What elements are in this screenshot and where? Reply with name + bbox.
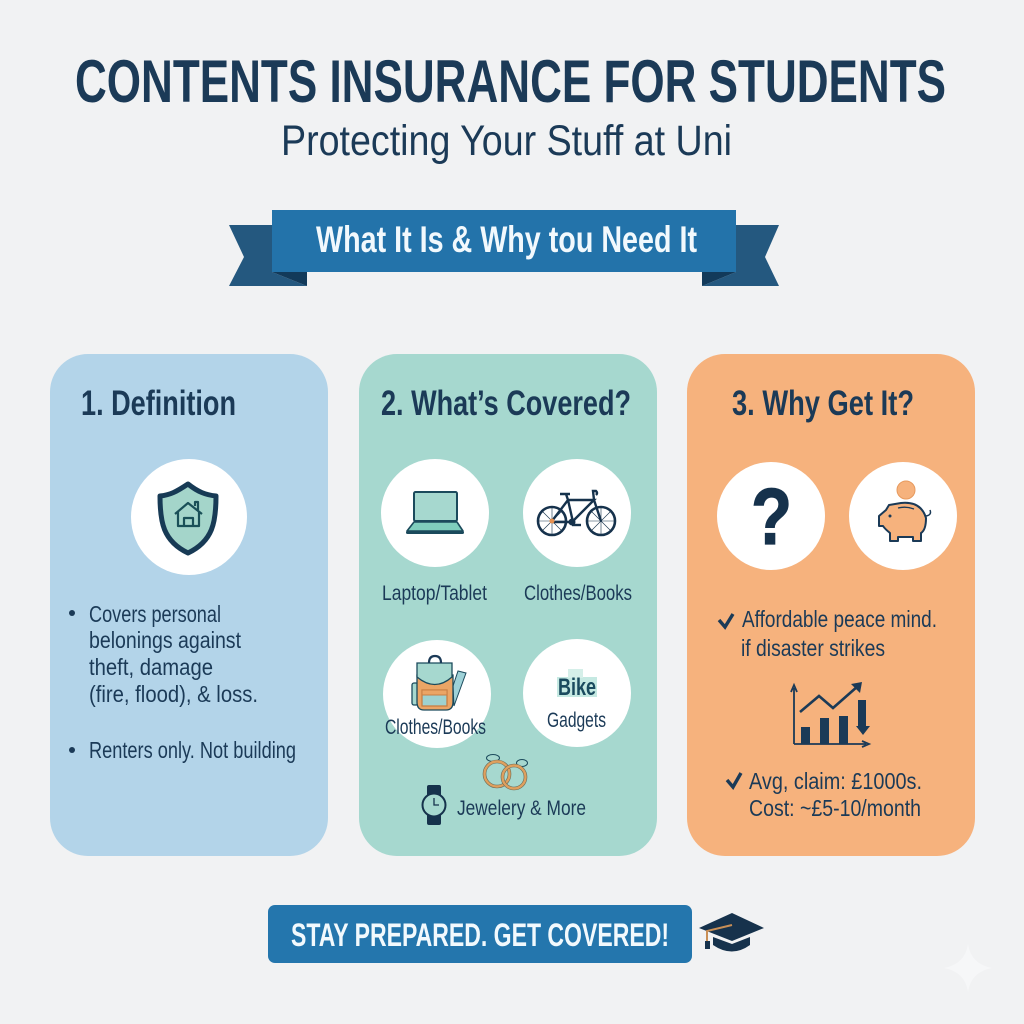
definition bullets: belonings against [89, 627, 242, 653]
icon: graduation cap [699, 913, 764, 952]
icon: shield with house [131, 459, 247, 575]
first benefit: if disaster strikes [741, 635, 885, 661]
circle: bike and gadgets: Gadgets [547, 709, 606, 732]
icon: question mark: ? [751, 472, 792, 561]
panel heading: covered: 2. What’s Covered? [381, 384, 631, 423]
label: laptop: Laptop/Tablet [382, 582, 487, 605]
decorative sparkle [944, 944, 992, 992]
label: jewelery and more: Jewelery & More [457, 797, 586, 820]
definition bullets [69, 601, 296, 763]
icon: bar and trend chart [791, 682, 870, 747]
banner text: What It Is & Why tou Need It [316, 219, 697, 260]
call to action button [268, 905, 692, 963]
icon: bicycle [523, 459, 631, 567]
label: clothes/books 1: Clothes/Books [524, 582, 632, 605]
call to action button: STAY PREPARED. GET COVERED! [291, 917, 669, 953]
definition bullets: Renters only. Not building [89, 737, 296, 763]
definition bullets: theft, damage [89, 654, 213, 680]
label: clothes/books 2: Clothes/Books [385, 716, 486, 739]
circle: bike and gadgets [523, 639, 631, 747]
panel: why get it [687, 354, 975, 856]
first benefit: Affordable peace mind. [742, 606, 937, 632]
icon: backpack [383, 640, 491, 748]
icon: laptop [381, 459, 489, 567]
icon: rings [484, 754, 528, 788]
panel heading: why: 3. Why Get It? [732, 384, 914, 423]
panel: what's covered [359, 354, 657, 856]
section banner [229, 210, 779, 286]
definition bullets: Covers personal [89, 601, 221, 627]
second benefit: Cost: ~£5-10/month [749, 795, 921, 821]
icon: watch [422, 785, 446, 825]
circle: bike and gadgets: Bike [558, 674, 596, 701]
icon: piggy bank [849, 462, 957, 570]
subtitle: Protecting Your Stuff at Uni [281, 117, 732, 165]
panel: definition [50, 354, 328, 856]
second benefit [727, 768, 922, 821]
icon: question mark [717, 462, 825, 570]
definition bullets: (fire, flood), & loss. [89, 681, 258, 707]
first benefit [719, 606, 937, 661]
second benefit: Avg, claim: £1000s. [749, 768, 922, 794]
panel heading: definition: 1. Definition [81, 384, 236, 423]
